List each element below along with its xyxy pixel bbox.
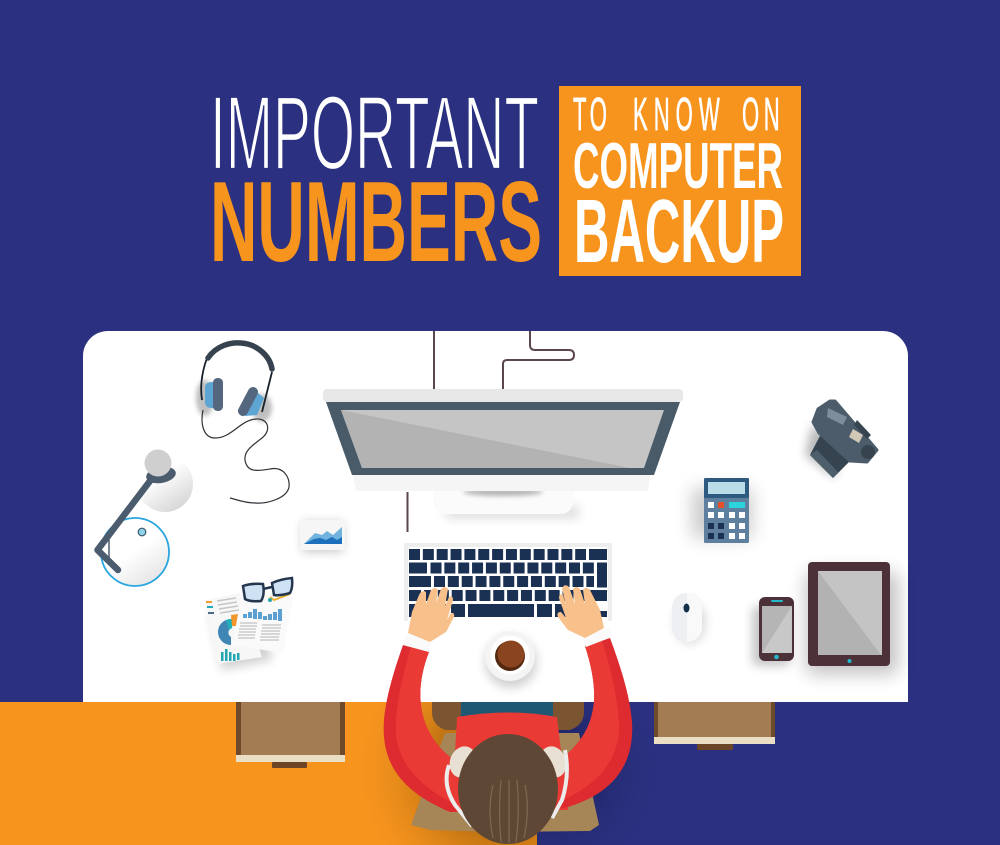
chair back [432, 702, 584, 730]
head [458, 734, 558, 844]
floor shadow around chair [350, 702, 670, 845]
monitor screen [341, 410, 664, 468]
lamp head [145, 465, 177, 485]
subheading: computer: COMPUTER [573, 129, 783, 202]
subheading: to know on: TO [573, 88, 611, 140]
calculator [692, 478, 752, 543]
monitor [323, 389, 683, 519]
sweater [384, 638, 632, 812]
mouse [672, 593, 706, 644]
chair seat [411, 733, 599, 832]
glasses [243, 578, 292, 602]
subheading: to know on: ON [742, 88, 784, 140]
report papers with glasses [205, 578, 293, 670]
headphone cord [202, 410, 289, 503]
heading: numbers: NUMBERS [210, 159, 542, 286]
monitor stand [433, 488, 580, 519]
left drawer [236, 702, 345, 768]
coffee cup [485, 631, 537, 688]
desk [83, 331, 908, 702]
cables [408, 331, 574, 532]
desk lamp [98, 450, 193, 586]
title [210, 75, 801, 286]
lamp base [101, 518, 169, 586]
left arm [384, 645, 462, 812]
lamp arm [98, 477, 153, 570]
subheading: to know on: KNOW [633, 88, 726, 140]
tablet [806, 562, 898, 674]
worn headphones [445, 743, 571, 826]
headphones [196, 343, 289, 503]
left hand [408, 587, 454, 642]
person at desk [384, 585, 632, 844]
subheading: backup: BACKUP [574, 182, 784, 282]
subheading: to know on [573, 88, 784, 140]
right drawer [654, 702, 775, 750]
left report sheet [205, 593, 262, 664]
lamp light [137, 456, 193, 512]
keyboard [404, 543, 612, 621]
torso shirt [461, 702, 553, 718]
right arm [552, 638, 632, 810]
heading: important: IMPORTANT [210, 75, 539, 192]
phone [752, 597, 794, 666]
camera lens [810, 432, 856, 478]
camera body [813, 401, 877, 462]
floor panel [0, 702, 537, 845]
title badge [559, 86, 801, 282]
cuffs [403, 633, 431, 652]
right hand [557, 585, 604, 638]
chart card icon [300, 520, 345, 552]
right report sheet [232, 590, 293, 653]
monitor frame [326, 402, 680, 475]
camera [805, 401, 877, 478]
